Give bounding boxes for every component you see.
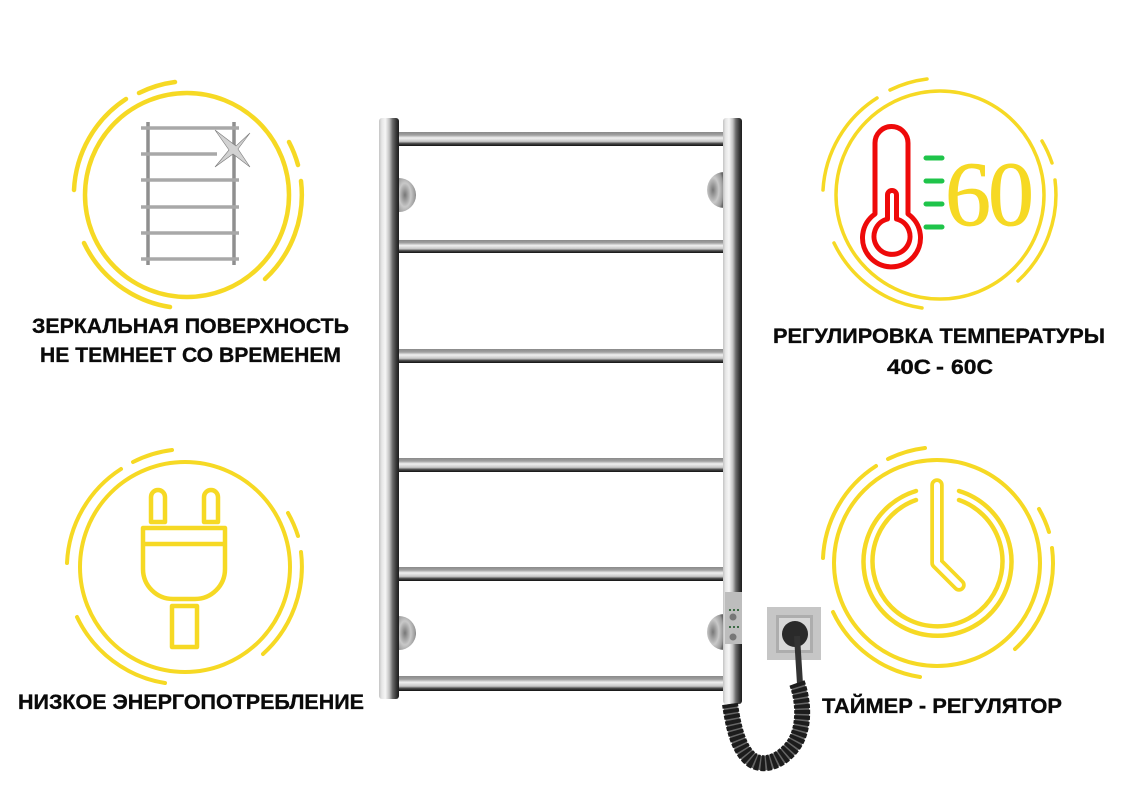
heading: timer: ТАЙМЕР - РЕГУЛЯТОР [822,693,1062,718]
wall brackets [399,172,724,650]
icon: clock power symbol [864,485,1012,636]
heading: temperature [773,324,1105,379]
panel: mirror surface [74,82,302,307]
icon: green level marks [926,158,942,227]
heading: mirror surface: ЗЕРКАЛЬНАЯ ПОВЕРХНОСТЬ [32,314,349,338]
heading: low energy: НИЗКОЕ ЭНЕРГОПОТРЕБЛЕНИЕ [18,690,364,714]
heading: temperature: РЕГУЛИРОВКА ТЕМПЕРАТУРЫ [773,324,1105,348]
icon: towel rail with sparkle [141,122,250,265]
icon: plug [143,490,225,647]
control unit [725,592,742,644]
power cord [730,636,802,763]
panel: timer [823,448,1053,677]
heading: mirror surface [32,314,349,367]
ring: mirror surface [74,82,302,307]
right post [723,118,742,704]
panel: temperature [823,79,1056,308]
heading: temperature: 60С [951,355,993,379]
left post [379,118,399,699]
ring: timer [823,448,1053,677]
value: 60: 60 [945,143,1031,245]
ring: temperature [823,79,1056,308]
icon: thermometer [863,127,920,267]
ring: low energy [67,450,302,683]
heading: temperature: - [936,355,944,379]
cross bars [397,132,725,691]
towel rail photo [379,118,821,763]
wall socket [767,607,821,660]
heading: temperature: 40С [887,355,931,379]
heading: mirror surface: НЕ ТЕМНЕЕТ СО ВРЕМЕНЕМ [40,343,341,367]
panel: low energy [67,450,302,683]
